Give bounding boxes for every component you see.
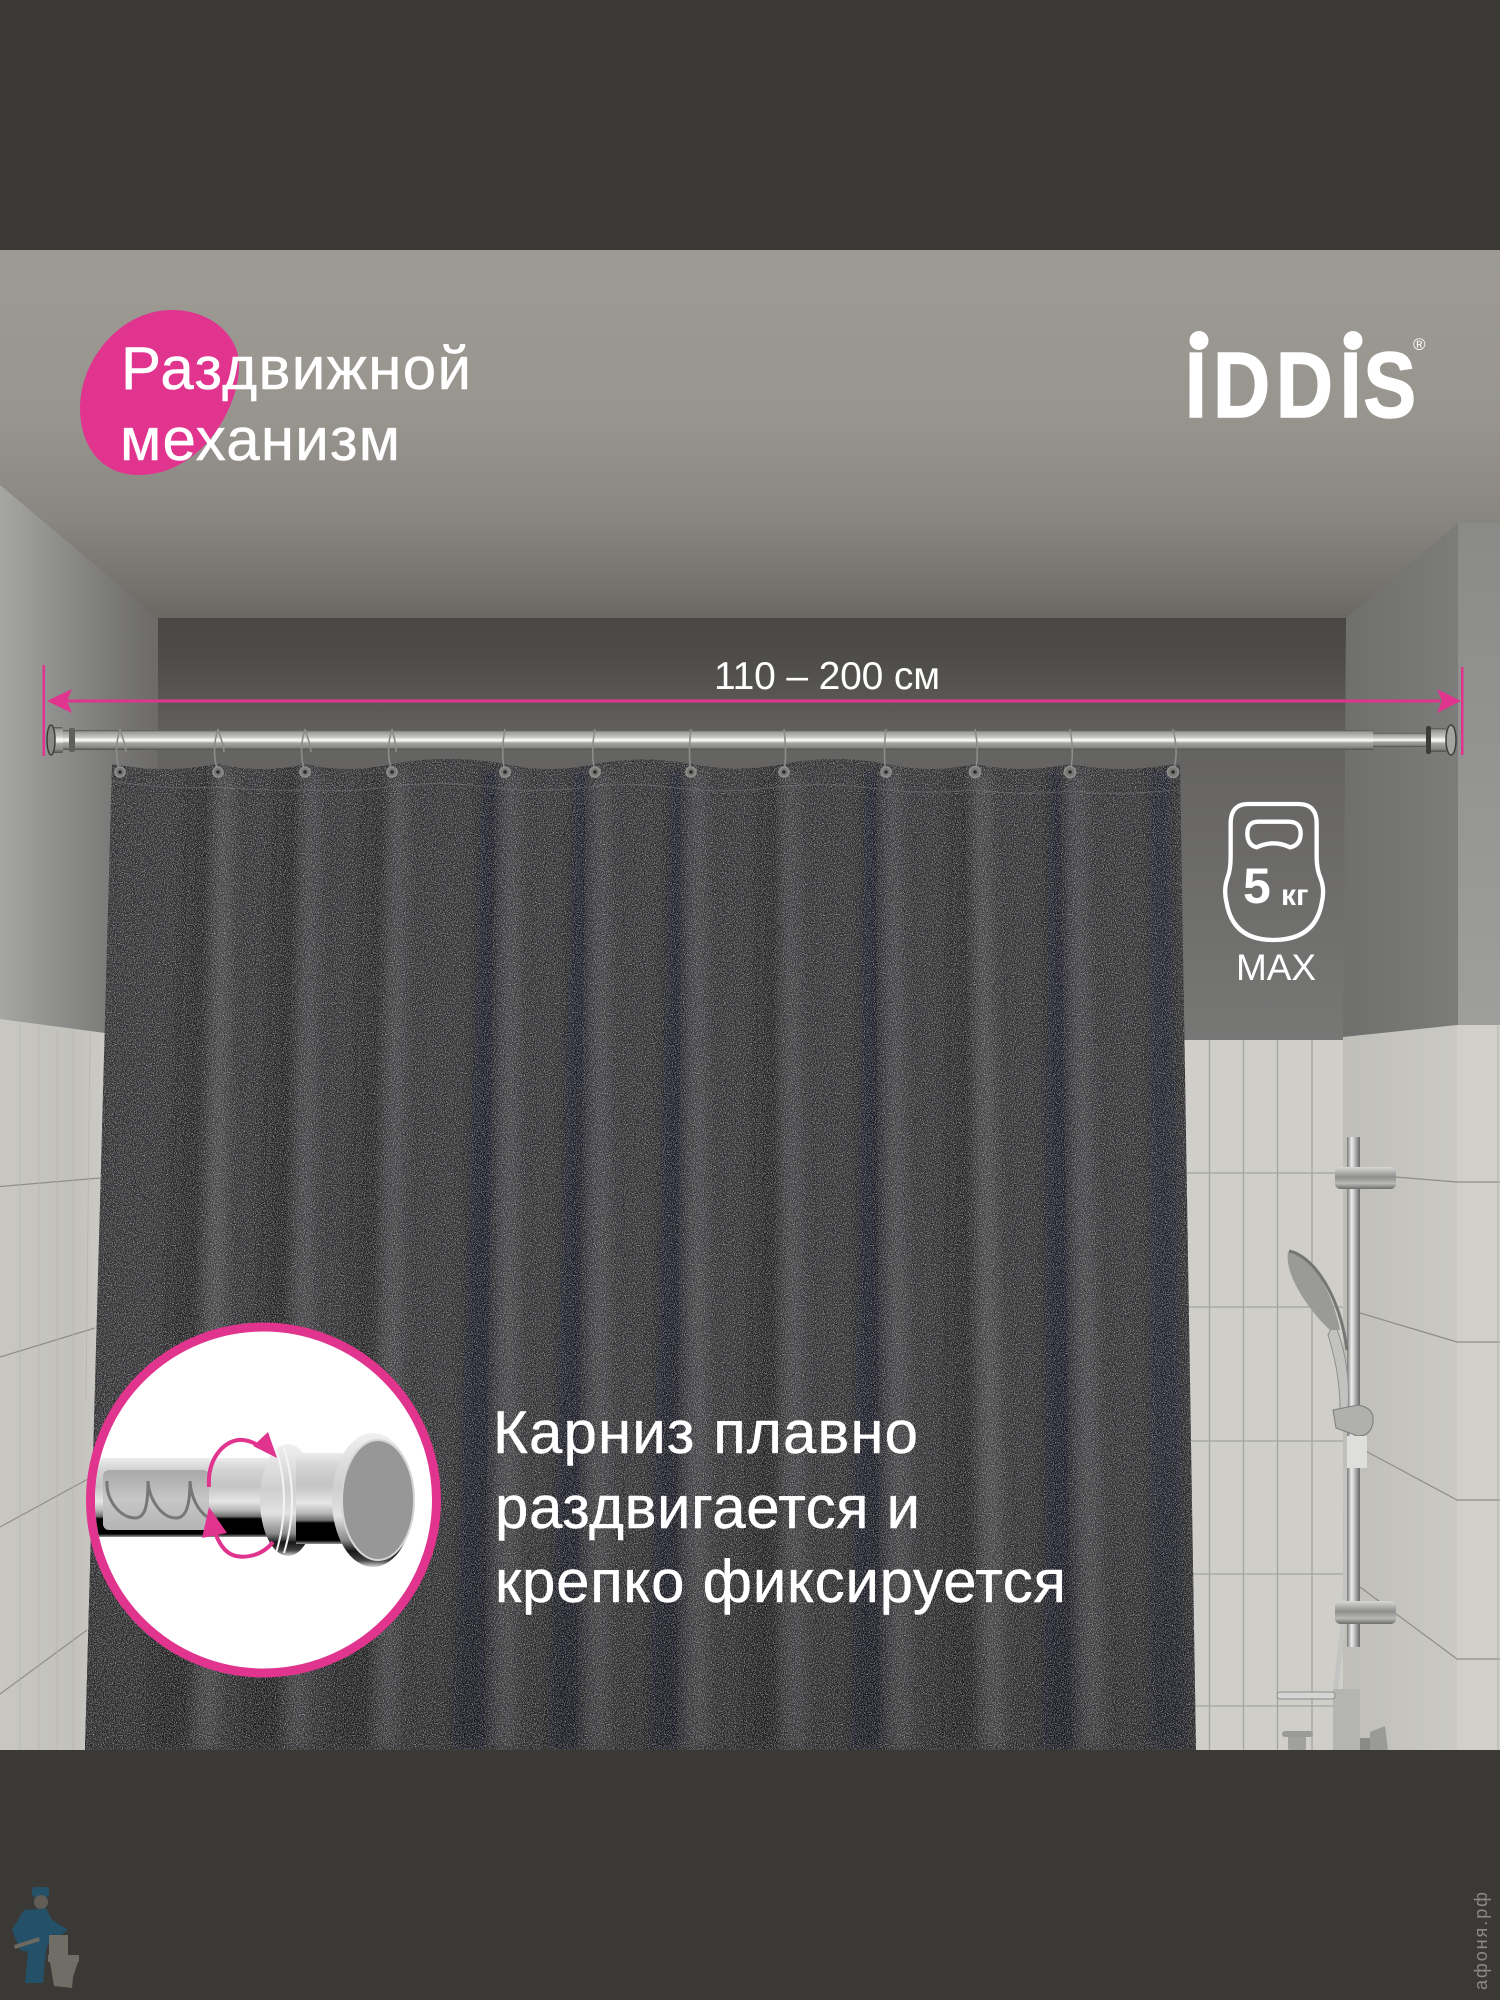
curtain hooks [115, 729, 1178, 778]
toilet [48, 1935, 79, 1988]
dimension line [42, 665, 1464, 756]
heading: sliding mechanism [80, 310, 471, 475]
kettlebell outline [1225, 804, 1323, 940]
text block: description: крепко фиксируется [495, 1548, 1066, 1615]
bottom bracket [1335, 1601, 1396, 1624]
logo: iddis: IDDIS [1185, 334, 1416, 437]
bottom band [0, 1750, 1500, 2000]
shower head [1288, 1252, 1340, 1330]
weight unit: кг [1281, 879, 1309, 912]
plumber figure [12, 1887, 68, 1983]
callout: rod detail circle [90, 1327, 436, 1673]
faucet [1277, 1689, 1388, 1750]
top bracket [1335, 1167, 1396, 1189]
shower hose [1335, 1470, 1347, 1692]
weight number: 5 [1243, 858, 1271, 914]
left flange [47, 725, 75, 755]
curtain rod [47, 725, 1456, 755]
max label: MAX [1236, 947, 1316, 988]
dimension arrow: 110-200 cm [42, 655, 1464, 756]
right pillar [1458, 523, 1500, 1043]
panel: rear wall tiles [1170, 1040, 1344, 1750]
shower slider [1333, 1405, 1373, 1436]
watermark: site name: афоня.рф [1471, 1892, 1491, 1990]
main tube [52, 730, 1373, 750]
heading text: механизм [120, 406, 400, 473]
shower handle [1328, 1322, 1348, 1410]
icon: kettlebell 5 kg max [1225, 804, 1323, 988]
right flange [1426, 725, 1456, 755]
thin rod section [1370, 733, 1430, 747]
panel: left wall tiles [0, 1019, 105, 1750]
icon: pink blob [80, 310, 239, 475]
heading text: Раздвижной [121, 335, 471, 402]
circle background [90, 1327, 436, 1673]
arrow: rotation top [209, 1432, 277, 1487]
top band [0, 0, 1500, 250]
logo: iddis: ® [1413, 335, 1426, 354]
curtain folds [150, 770, 1187, 1750]
text block: description: раздвигается и [495, 1474, 920, 1541]
right wall [1343, 523, 1458, 1060]
shower system [1277, 1137, 1396, 1750]
curtain weave [80, 750, 1205, 1760]
panel: right wall tiles [1343, 1025, 1500, 1750]
curtain fabric [80, 750, 1205, 1760]
arrow: rotation bottom [202, 1507, 273, 1557]
left wall [0, 485, 158, 1070]
watermark: plumber [12, 1887, 79, 1988]
text block: description: Карниз плавно [493, 1399, 918, 1466]
ceiling [0, 250, 1500, 618]
dimension label: 110 – 200 см [714, 655, 940, 698]
shower curtain [80, 750, 1205, 1760]
rear wall [158, 618, 1346, 1048]
shower bar [1347, 1137, 1360, 1647]
rod illustration [90, 1433, 414, 1567]
